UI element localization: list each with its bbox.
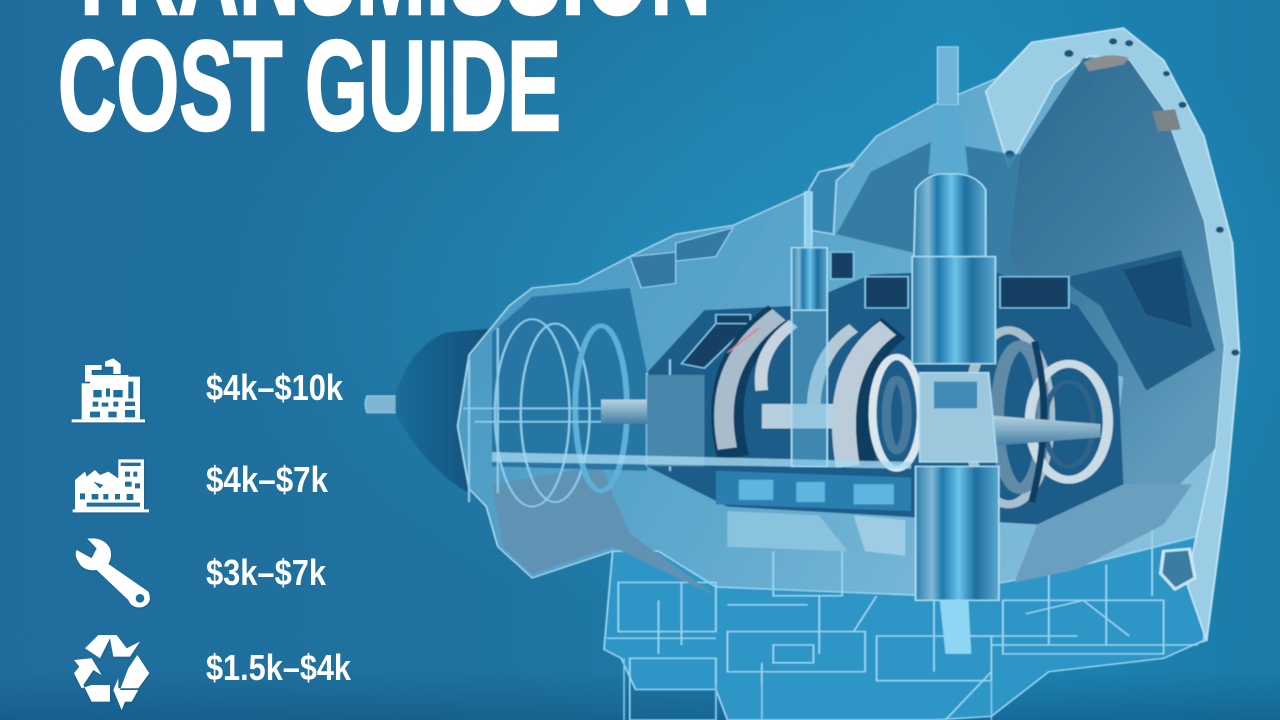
bell housing rim bbox=[986, 28, 1239, 640]
dark window blocks bbox=[681, 252, 1069, 368]
price: $4k–$10k: $4k–$10k bbox=[206, 367, 344, 408]
row 4: used bbox=[74, 635, 352, 710]
main horizontal shaft bbox=[986, 415, 1100, 446]
title line: cost guide: COST GUIDE bbox=[58, 15, 561, 158]
bolt holes bbox=[1005, 38, 1239, 356]
icon: large factory bbox=[72, 358, 145, 422]
transmission cutaway illustration bbox=[365, 28, 1239, 720]
icon: small factory bbox=[73, 459, 149, 512]
price: $3k–$7k: $3k–$7k bbox=[206, 552, 327, 593]
central gear compartment bbox=[647, 270, 1123, 524]
title bbox=[58, 0, 711, 158]
upper housing shading bbox=[836, 141, 1049, 350]
tail shaft bbox=[365, 396, 400, 413]
vertical column bbox=[912, 47, 999, 654]
lower right steel panel bbox=[1014, 484, 1192, 582]
secondary column bbox=[792, 192, 827, 466]
lower gear tones bbox=[716, 471, 911, 511]
icon: recycle bbox=[74, 635, 149, 710]
tail cone bbox=[396, 328, 509, 495]
interior shadow panel bbox=[1060, 250, 1215, 391]
legs bbox=[624, 658, 991, 720]
price: $1.5k–$4k: $1.5k–$4k bbox=[206, 647, 352, 688]
clutch drums bbox=[724, 315, 1108, 504]
gear case wall bbox=[647, 375, 704, 466]
outer housing silhouette bbox=[458, 28, 1239, 667]
price: $4k–$7k: $4k–$7k bbox=[206, 459, 329, 500]
lower left case bbox=[492, 466, 716, 596]
row 1: new factory transmission bbox=[72, 358, 344, 422]
icon: wrench bbox=[76, 538, 150, 607]
cost list bbox=[72, 358, 352, 710]
row 3: rebuilt bbox=[76, 538, 327, 607]
row 2: remanufactured bbox=[73, 459, 329, 512]
horn detail bbox=[1161, 549, 1195, 589]
long horizontal highlight band bbox=[492, 452, 911, 469]
left clutch rings bbox=[463, 319, 670, 507]
bell housing interior bbox=[1009, 58, 1224, 489]
lower valve body and sump bbox=[604, 520, 1210, 720]
